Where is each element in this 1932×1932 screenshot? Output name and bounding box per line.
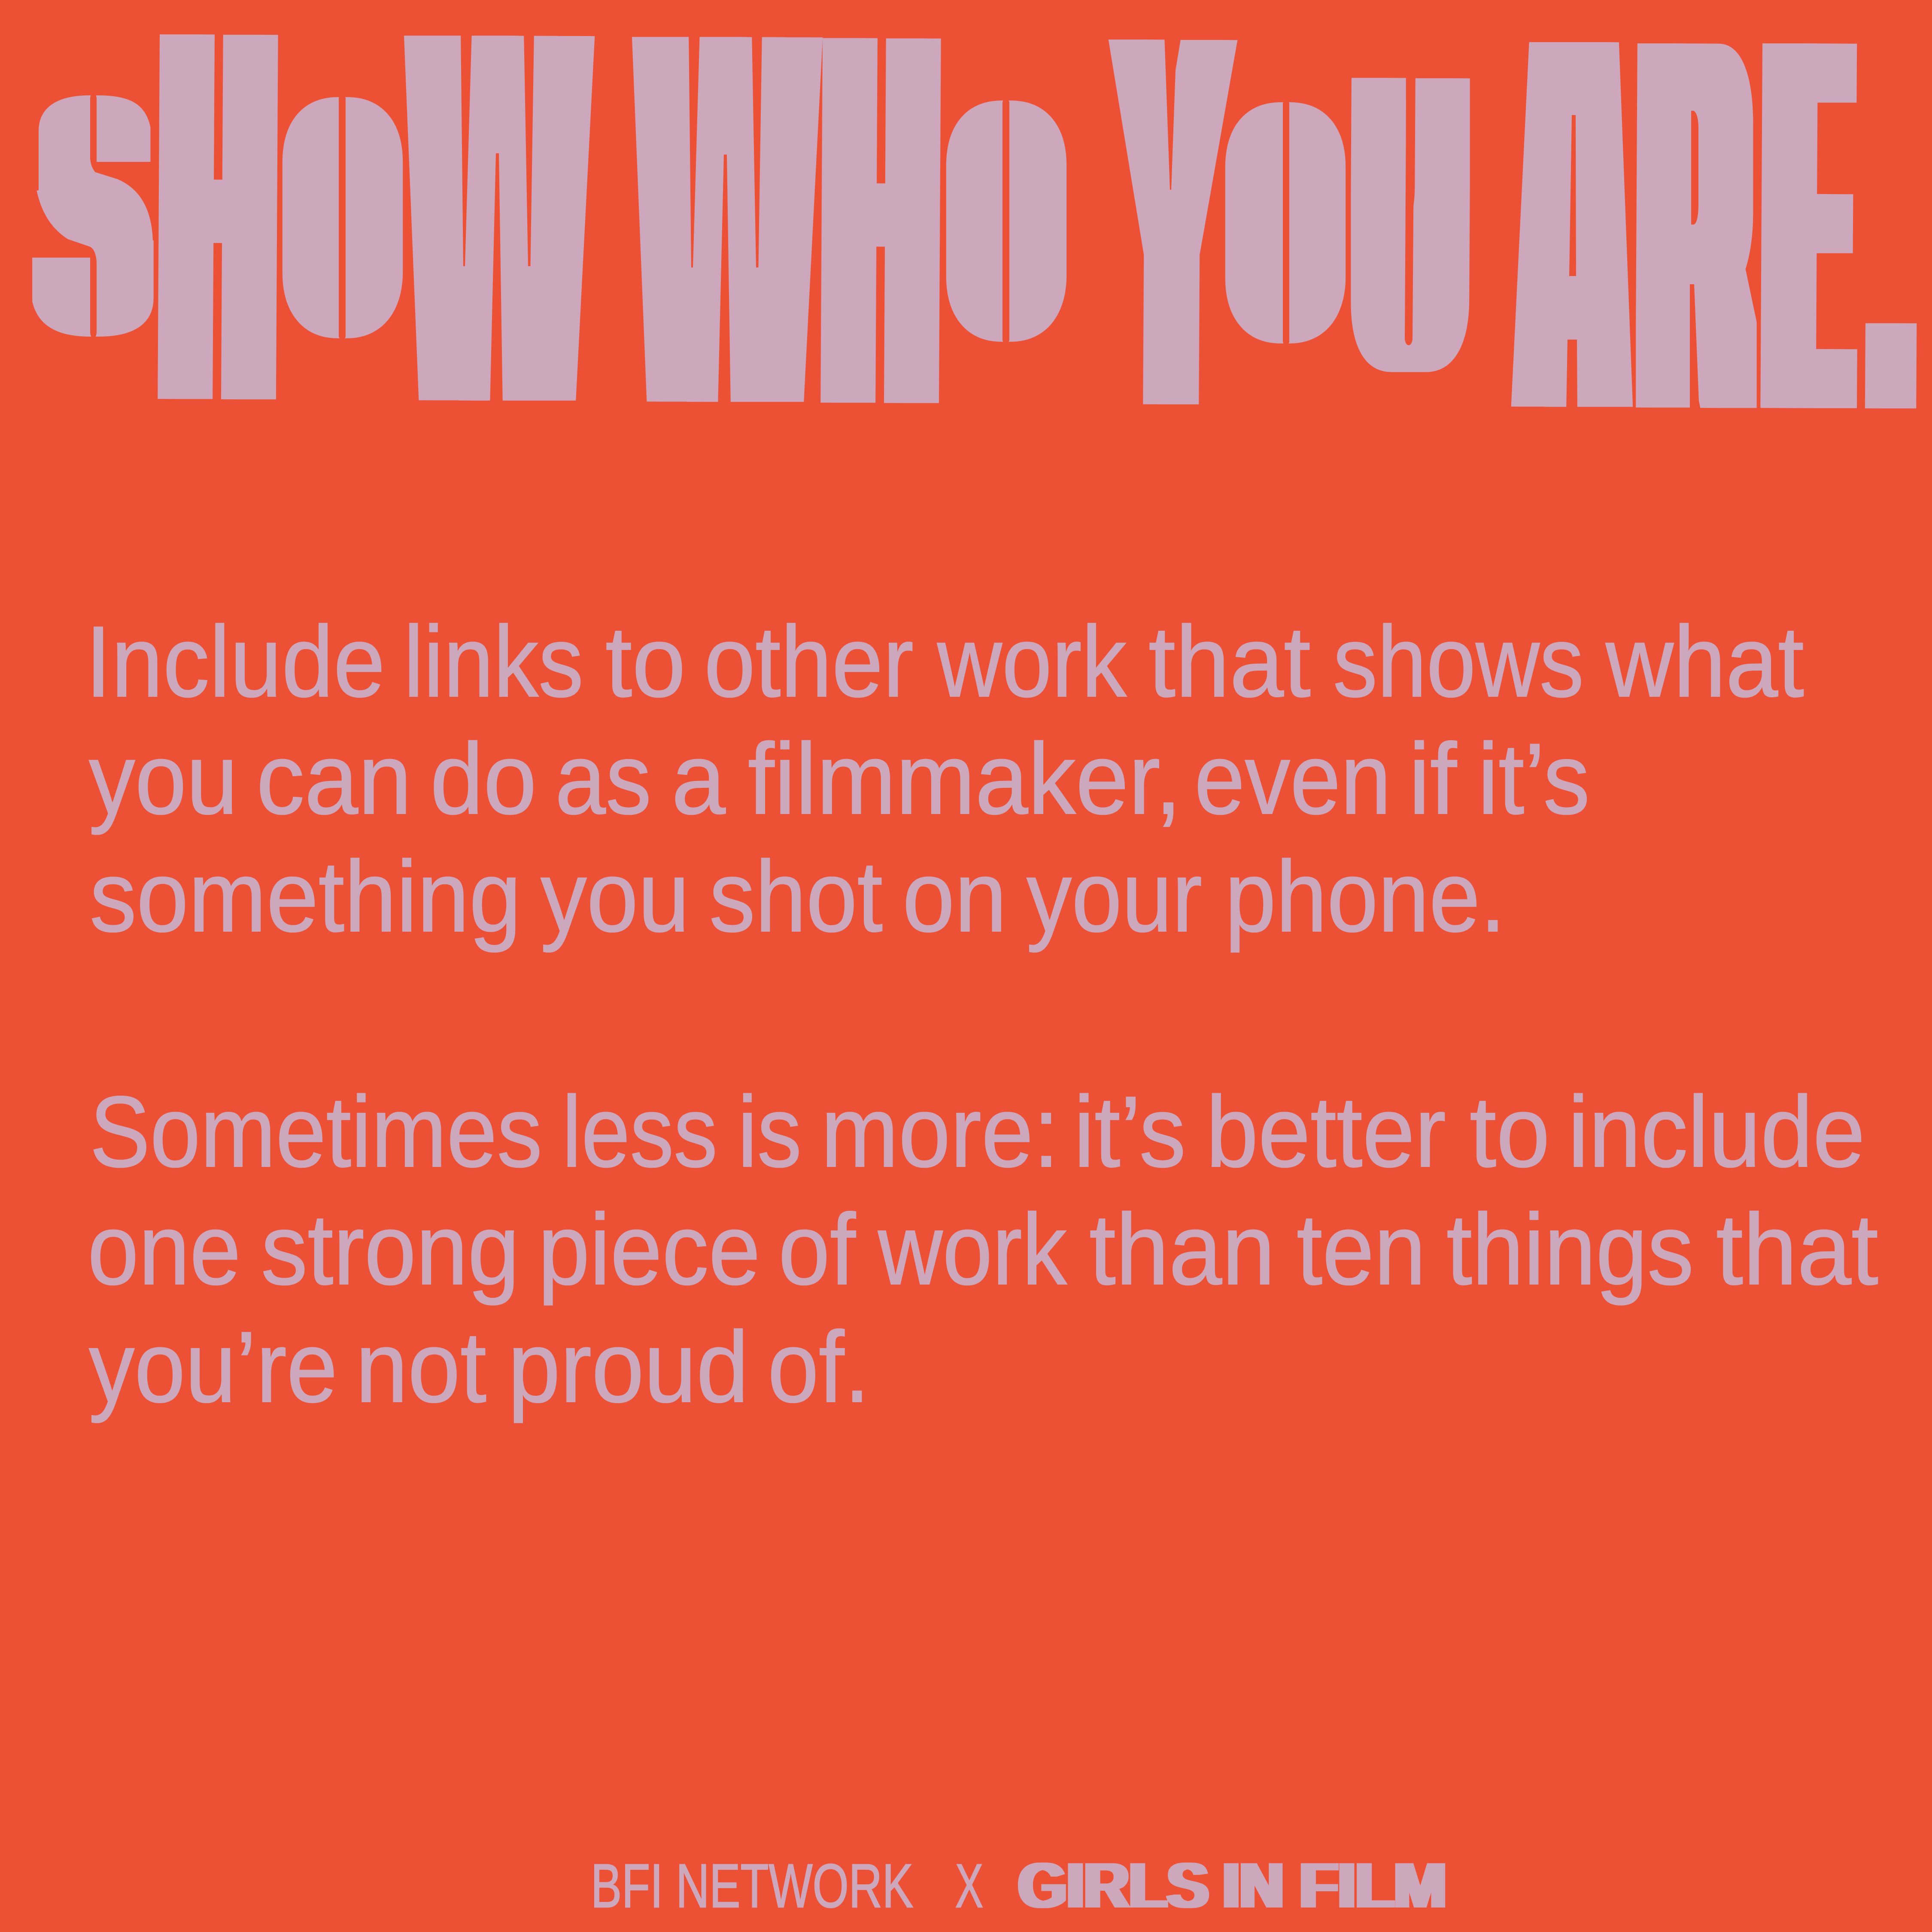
title: SHOW WHO YOU ARE.: O (943, 117, 1069, 325)
footer: BFI NETWORK: BFI NETWORK (591, 1851, 913, 1920)
paragraph: include links: work (937, 605, 1127, 718)
paragraph: less is more: not (355, 1310, 486, 1423)
paragraph: less is more: include (1568, 1075, 1865, 1188)
paragraph: less is more: proud (508, 1310, 749, 1423)
paragraph: include links: shows (1333, 605, 1584, 718)
title: SHOW WHO YOU ARE.: O (279, 113, 406, 322)
title: SHOW WHO YOU ARE.: R (1643, 0, 1744, 451)
paragraph: include links: other (704, 605, 914, 718)
paragraph: less is more: less (562, 1075, 717, 1188)
paragraph: include links: it’s (1478, 722, 1590, 835)
paragraph: include links: links (404, 605, 583, 718)
paragraph: include links: you (89, 722, 238, 835)
paragraph: include links: phone. (1225, 840, 1506, 953)
paragraph: less is more: you’re (89, 1310, 337, 1423)
title: SHOW WHO YOU ARE. (30, 0, 1910, 530)
paragraph: less is more: to (1470, 1075, 1550, 1188)
paragraph: less is more: one (88, 1193, 241, 1306)
title: SHOW WHO YOU ARE.: U (1359, 76, 1461, 371)
paragraph: include links: even (1194, 722, 1391, 835)
footer: GIRLS IN FILM: GIRLS (1018, 1849, 1209, 1921)
paragraph: less is more (88, 1075, 1878, 1423)
paragraph: less is more: work (878, 1193, 1067, 1306)
title: SHOW WHO YOU ARE.: O (1222, 118, 1349, 327)
paragraph: include links: as (555, 722, 651, 835)
paragraph: include links: what (1605, 605, 1804, 718)
paragraph: less is more: that (1716, 1193, 1878, 1306)
paragraph: include links: do (430, 722, 537, 835)
paragraph: include links: on (902, 840, 1007, 953)
paragraph: include links: something (90, 840, 521, 953)
paragraph: less is more: things (1446, 1193, 1694, 1306)
paragraph: less is more: ten (1297, 1193, 1426, 1306)
paragraph: less is more: is (738, 1075, 802, 1188)
paragraph: include links: filmmaker, (748, 722, 1182, 835)
paragraph: include links (85, 605, 1804, 953)
footer: GIRLS IN FILM (1018, 1849, 1446, 1921)
paragraph: include links: a (671, 722, 726, 835)
paragraph: less is more: than (1089, 1193, 1275, 1306)
paragraph: less is more: strong (261, 1193, 519, 1306)
paragraph: less is more: of. (768, 1310, 870, 1423)
footer: GIRLS IN FILM: IN (1223, 1849, 1284, 1921)
title: SHOW WHO YOU ARE.: S (30, 112, 158, 320)
paragraph: include links: if (1409, 722, 1457, 835)
footer: X: X (955, 1851, 983, 1920)
paragraph: include links: to (605, 605, 686, 718)
paragraph: include links: you (541, 840, 690, 953)
footer: GIRLS IN FILM: FILM (1300, 1849, 1446, 1921)
paragraph: include links: your (1027, 840, 1202, 953)
paragraph: include links: can (256, 722, 412, 835)
paragraph: less is more: better (1206, 1075, 1446, 1188)
paragraph: include links: Include (85, 605, 385, 718)
paragraph: include links: shot (709, 840, 883, 953)
paragraph: include links: that (1148, 605, 1311, 718)
paragraph: less is more: Sometimes (90, 1075, 542, 1188)
paragraph: less is more: more: (821, 1075, 1059, 1188)
paragraph: less is more: of (778, 1193, 856, 1306)
paragraph: less is more: it’s (1074, 1075, 1186, 1188)
paragraph: less is more: piece (538, 1193, 760, 1306)
